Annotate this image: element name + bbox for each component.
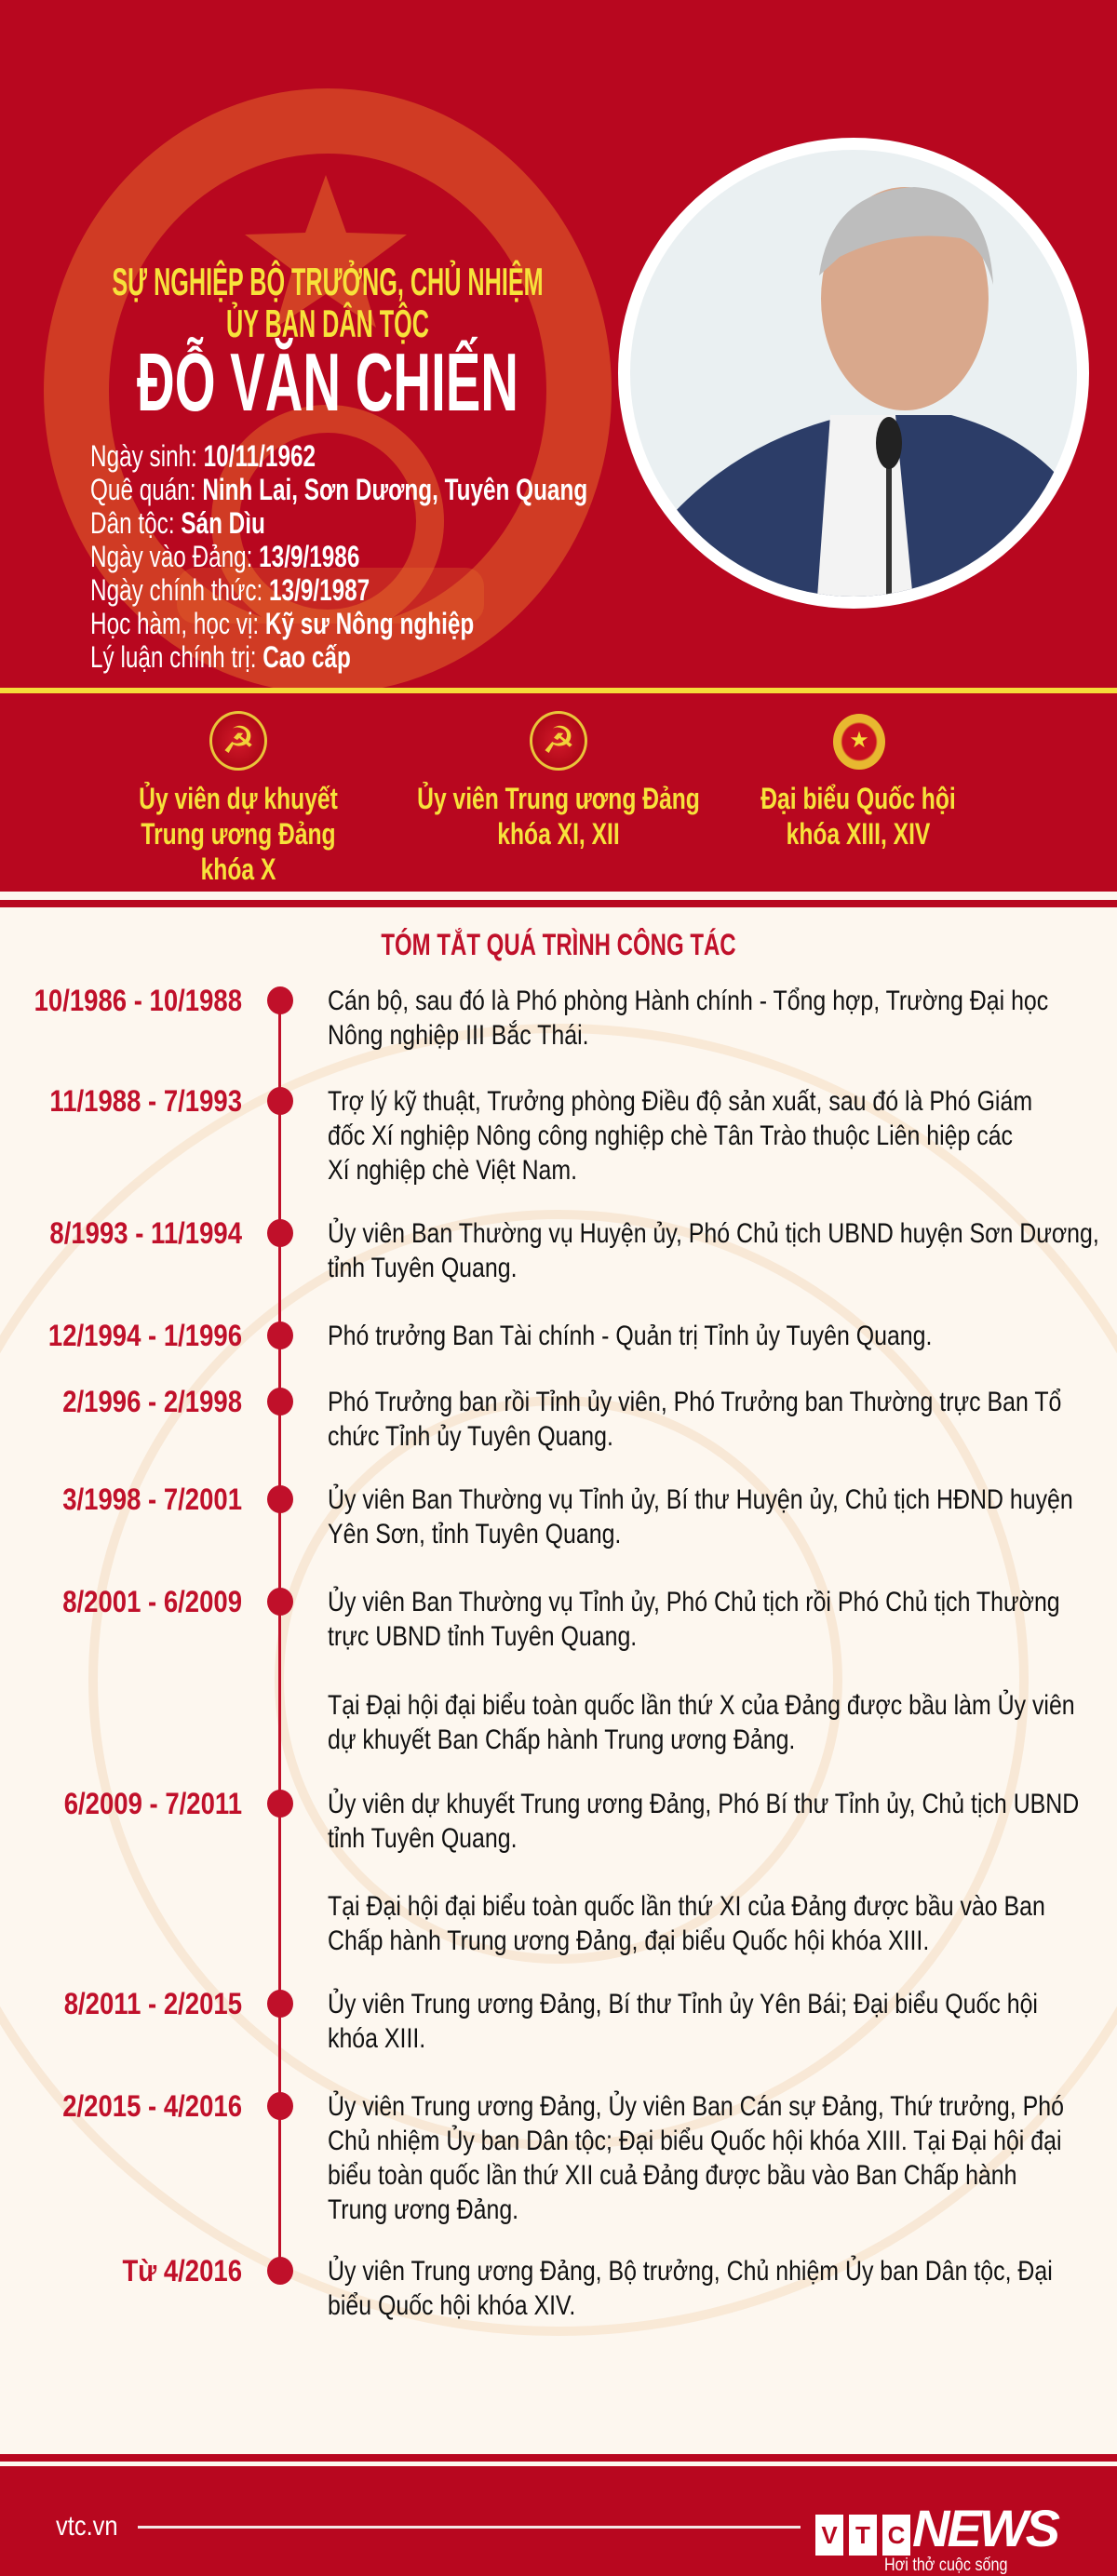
- entry 2: đốc Xí nghiệp Nông công nghiệp chè Tân Trào thuộc Liên hiệp các: [328, 1120, 1013, 1151]
- entry 6: Yên Sơn, tỉnh Tuyên Quang.: [328, 1519, 621, 1550]
- entry 9: khóa XIII.: [328, 2023, 425, 2054]
- title: ỦY BAN DÂN TỘC: [226, 302, 429, 345]
- yellow divider: [0, 688, 1117, 693]
- paragraph: Đại hội XI: [328, 1891, 1045, 1956]
- label 1: [139, 782, 338, 886]
- logo: VTC NEWS: T: [855, 2521, 870, 2549]
- entry 7: [62, 1585, 1060, 1652]
- personal info: Ngày vào Đảng: 13/9/1986: [90, 540, 359, 573]
- footer: [0, 2466, 1117, 2576]
- personal info: Dân tộc: Sán Dìu: [90, 506, 265, 540]
- entry 1: [34, 984, 1048, 1051]
- label 2: [417, 782, 700, 851]
- paragraph: Đại hội XI: Tại Đại hội đại biểu toàn quốc lần thứ XI của Đảng được bầu vào Ban: [328, 1891, 1045, 1922]
- entry 11: Từ 4/2016: [122, 2254, 242, 2288]
- paragraph: Đại hội X: dự khuyết Ban Chấp hành Trung ương Đảng.: [328, 1724, 795, 1755]
- paragraph: Đại hội X: Tại Đại hội đại biểu toàn quốc lần thứ X của Đảng được bầu làm Ủy viên: [328, 1690, 1075, 1721]
- logo: VTC NEWS: NEWS: [912, 2499, 1057, 2557]
- label 2: khóa XI, XII: [497, 817, 620, 851]
- label 3: khóa XIII, XIV: [787, 817, 930, 851]
- icon: national emblem: ★: [849, 727, 869, 753]
- entry 9: Ủy viên Trung ương Đảng, Bí thư Tỉnh ủy Yên Bái; Đại biểu Quốc hội: [328, 1989, 1038, 2019]
- logo: VTC NEWS: V: [821, 2521, 838, 2549]
- entry 1: Nông nghiệp III Bắc Thái.: [328, 1020, 589, 1051]
- entry 4: 12/1994 - 1/1996: [48, 1319, 242, 1352]
- footer url: vtc.vn: [56, 2511, 118, 2542]
- icon: hammer sickle 2: [530, 711, 587, 771]
- label 1: Trung ương Đảng: [141, 817, 336, 851]
- entry 10: [62, 2089, 1064, 2225]
- label 3: [760, 782, 956, 851]
- paragraph: Đại hội X: [328, 1690, 1075, 1755]
- entry 8: tỉnh Tuyên Quang.: [328, 1823, 517, 1854]
- personal info: [90, 439, 587, 674]
- entry 5: 2/1996 - 2/1998: [62, 1385, 242, 1418]
- entry 9: [64, 1987, 1038, 2054]
- header panel: [0, 0, 1117, 688]
- personal info: Lý luận chính trị: Cao cấp: [90, 640, 351, 674]
- entry 6: [62, 1483, 1073, 1550]
- label 1: khóa X: [201, 852, 276, 886]
- entry 1: Cán bộ, sau đó là Phó phòng Hành chính - Tổng hợp, Trường Đại học: [328, 986, 1048, 1016]
- timeline: [278, 1014, 281, 2258]
- entry 8: Ủy viên dự khuyết Trung ương Đảng, Phó Bí thư Tỉnh ủy, Chủ tịch UBND: [328, 1789, 1079, 1819]
- label 1: Ủy viên dự khuyết: [139, 782, 338, 815]
- entry 10: biểu toàn quốc lần thứ XII cuả Đảng được bầu vào Ban Chấp hành: [328, 2160, 1016, 2191]
- entry 10: Trung ương Đảng.: [328, 2194, 518, 2225]
- portrait photo: [618, 138, 1089, 609]
- entry 11: Ủy viên Trung ương Đảng, Bộ trưởng, Chủ nhiệm Ủy ban Dân tộc, Đại: [328, 2256, 1053, 2287]
- entry 10: Ủy viên Trung ương Đảng, Ủy viên Ban Cán sự Đảng, Thứ trưởng, Phó: [328, 2091, 1064, 2122]
- title: SỰ NGHIỆP BỘ TRƯỞNG, CHỦ NHIỆM: [112, 260, 544, 303]
- label 2: Ủy viên Trung ương Đảng: [417, 782, 700, 815]
- entry 11: [122, 2254, 1053, 2321]
- entry 5: [62, 1385, 1061, 1452]
- paragraph: Đại hội XI: Chấp hành Trung ương Đảng, đại biểu Quốc hội khóa XIII.: [328, 1925, 929, 1956]
- entry 10: 2/2015 - 4/2016: [62, 2089, 242, 2123]
- emblem watermark: [44, 88, 612, 688]
- entry 2: Xí nghiệp chè Việt Nam.: [328, 1155, 577, 1186]
- entry 4: [48, 1319, 932, 1352]
- positions panel: [0, 693, 1117, 892]
- section heading: TÓM TẮT QUÁ TRÌNH CÔNG TÁC: [381, 928, 736, 961]
- entry 3: [49, 1216, 1099, 1283]
- entry 5: chức Tỉnh ủy Tuyên Quang.: [328, 1421, 613, 1452]
- red stripe: [0, 900, 1117, 907]
- entry 6: 3/1998 - 7/2001: [62, 1483, 242, 1516]
- logo: VTC NEWS: C: [888, 2521, 905, 2549]
- entry 8: 6/2009 - 7/2011: [64, 1787, 242, 1820]
- entry 3: Ủy viên Ban Thường vụ Huyện ủy, Phó Chủ tịch UBND huyện Sơn Dương,: [328, 1218, 1099, 1249]
- logo: VTC NEWS: Hơi thở cuộc sống: [884, 2556, 1008, 2575]
- entry 7: 8/2001 - 6/2009: [62, 1585, 242, 1618]
- entry 5: Phó Trưởng ban rồi Tỉnh ủy viên, Phó Trưởng ban Thường trực Ban Tổ: [328, 1387, 1061, 1417]
- entry 6: Ủy viên Ban Thường vụ Tỉnh ủy, Bí thư Huyện ủy, Chủ tịch HĐND huyện: [328, 1484, 1073, 1515]
- personal info: Quê quán: Ninh Lai, Sơn Dương, Tuyên Quang: [90, 473, 587, 506]
- icon: hammer sickle 1: ☭: [222, 719, 255, 762]
- entry 1: 10/1986 - 10/1988: [34, 984, 242, 1017]
- background pattern: [0, 1024, 1117, 2336]
- entry 9: 8/2011 - 2/2015: [64, 1987, 242, 2020]
- entry 11: biểu Quốc hội khóa XIV.: [328, 2290, 575, 2321]
- entry 3: 8/1993 - 11/1994: [49, 1216, 242, 1250]
- personal info: Ngày chính thức: 13/9/1987: [90, 573, 370, 607]
- entry 10: Chủ nhiệm Ủy ban Dân tộc; Đại biểu Quốc hội khóa XIII. Tại Đại hội đại: [328, 2126, 1061, 2156]
- entry 8: [64, 1787, 1079, 1854]
- footer stripe: [0, 2454, 1117, 2462]
- entry 7: Ủy viên Ban Thường vụ Tỉnh ủy, Phó Chủ tịch rồi Phó Chủ tịch Thường: [328, 1587, 1060, 1617]
- entry 7: trực UBND tỉnh Tuyên Quang.: [328, 1621, 637, 1652]
- entry 2: Trợ lý kỹ thuật, Trưởng phòng Điều độ sản xuất, sau đó là Phó Giám: [328, 1086, 1032, 1117]
- label 3: Đại biểu Quốc hội: [760, 782, 956, 815]
- logo: VTC NEWS: [815, 2499, 1059, 2575]
- title: [112, 260, 544, 345]
- icon: national emblem: [833, 714, 885, 770]
- entry 4: Phó trưởng Ban Tài chính - Quản trị Tỉnh ủy Tuyên Quang.: [328, 1321, 932, 1351]
- personal info: Học hàm, học vị: Kỹ sư Nông nghiệp: [90, 607, 474, 640]
- entry 3: tỉnh Tuyên Quang.: [328, 1253, 517, 1283]
- personal info: Ngày sinh: 10/11/1962: [90, 439, 316, 473]
- icon: hammer sickle 2: ☭: [542, 719, 575, 762]
- entry 2: 11/1988 - 7/1993: [49, 1084, 242, 1118]
- name: ĐỖ VĂN CHIẾN: [137, 336, 518, 428]
- entry 2: [49, 1084, 1032, 1186]
- icon: hammer sickle 1: [209, 711, 267, 771]
